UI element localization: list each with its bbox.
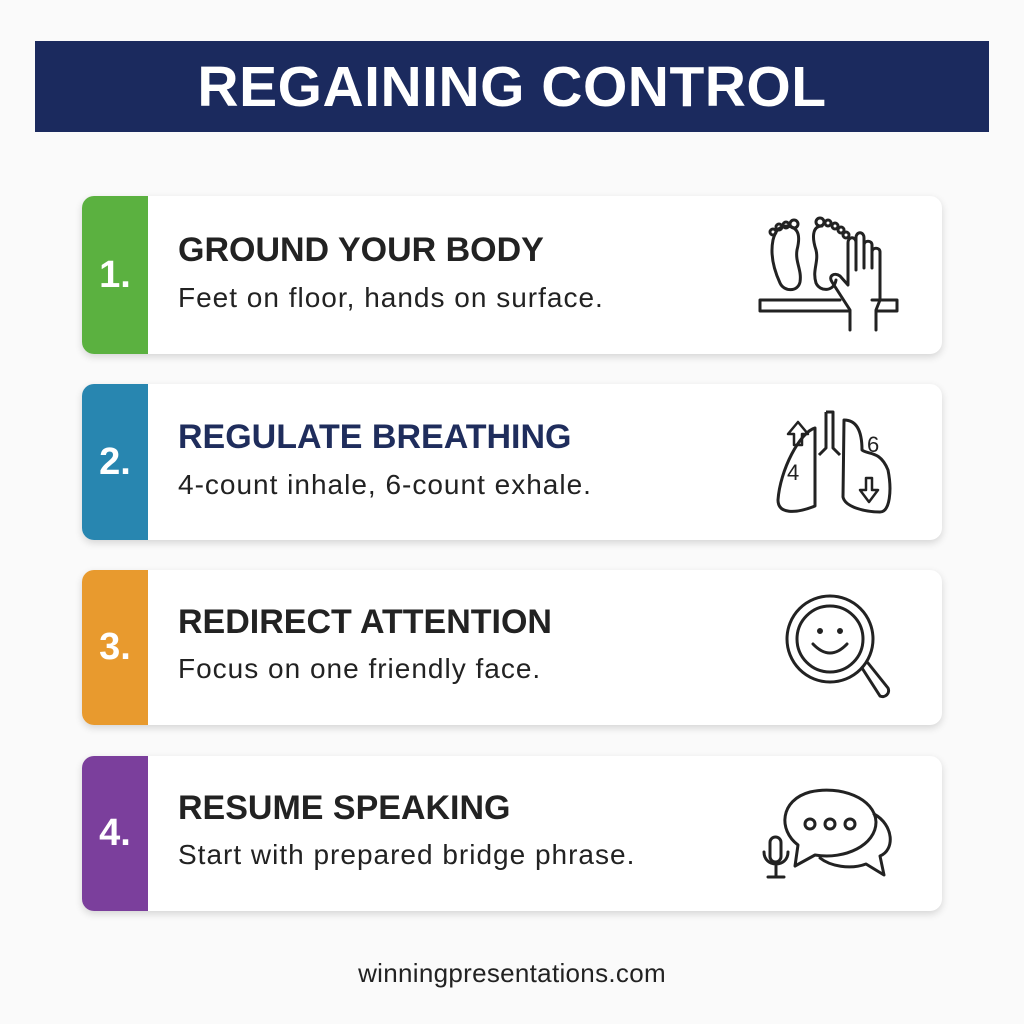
- heading 1: GROUND YOUR BODY: [178, 231, 544, 269]
- text 3: Focus on one friendly face.: [178, 653, 541, 684]
- panel: step 3: [82, 570, 942, 725]
- number 3: [82, 570, 148, 725]
- number 4: [82, 756, 148, 911]
- title: REGAINING CONTROL: [197, 55, 827, 119]
- heading 4: RESUME SPEAKING: [178, 789, 510, 827]
- panel: step 2: [82, 384, 942, 540]
- heading 2: REGULATE BREATHING: [178, 418, 572, 456]
- panel: step 1: [82, 196, 942, 354]
- panel: step 4: [82, 756, 942, 911]
- title: [35, 41, 989, 132]
- number 2: [82, 384, 148, 540]
- number 3: 3.: [99, 626, 131, 668]
- text 4: Start with prepared bridge phrase.: [178, 839, 635, 870]
- text 2: 4-count inhale, 6-count exhale.: [178, 469, 592, 500]
- number 4: 4.: [99, 812, 131, 854]
- number 1: [82, 196, 148, 354]
- icon: feet and hand: [758, 216, 898, 332]
- number 2: 2.: [99, 440, 131, 482]
- number 1: 1.: [99, 254, 131, 296]
- icon: lungs: [776, 410, 892, 514]
- icon: speech bubbles and mic: [762, 788, 892, 878]
- footer: winningpresentations.com: [358, 958, 666, 988]
- heading 3: REDIRECT ATTENTION: [178, 603, 552, 641]
- text 1: Feet on floor, hands on surface.: [178, 282, 604, 313]
- icon: lungs: 6: [867, 432, 879, 457]
- icon: magnifier smile: [786, 594, 890, 698]
- icon: lungs: 4: [787, 460, 799, 485]
